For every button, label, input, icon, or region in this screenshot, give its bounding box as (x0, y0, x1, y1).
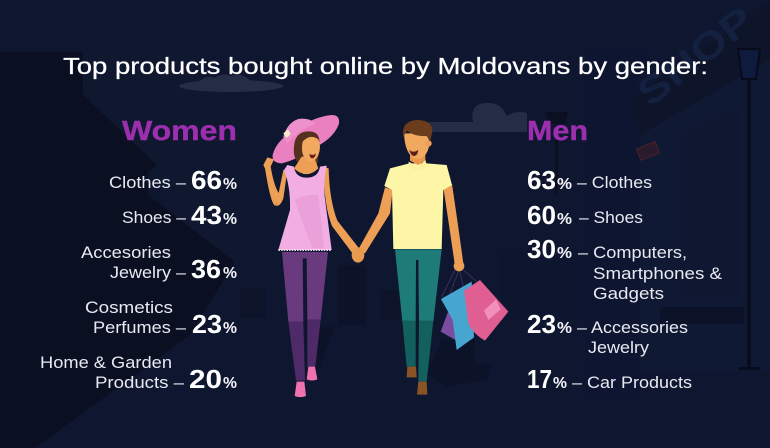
row: computers 30%: Smartphones & (593, 264, 723, 283)
man collar (408, 160, 427, 171)
row: computers 30%: % (557, 245, 572, 262)
row: shoes 60%: 60 (527, 200, 556, 230)
blue bag (441, 282, 474, 350)
man ear (425, 140, 432, 147)
row: car products 17%: – Car Products (572, 373, 692, 392)
hat flower (283, 129, 291, 138)
row: clothes 63%: – Clothes (577, 173, 652, 192)
row: cosmetics perfumes 23%: Cosmetics (85, 298, 173, 317)
row: clothes 66%: % (223, 176, 237, 193)
heading: women: Women (122, 115, 237, 146)
row: accessories jewelry 23%: – Accessories (577, 318, 688, 337)
woman legs lower (288, 319, 321, 381)
row: clothes 63%: % (557, 176, 572, 193)
shopping bags (441, 270, 508, 350)
row: shoes 43%: Shoes – (122, 208, 187, 227)
row: accessories jewelry 23%: 23 (527, 309, 556, 339)
woman hair (294, 131, 319, 163)
cloud right (423, 103, 527, 132)
row: clothes 63%: 63 (527, 165, 556, 195)
row: shoes 43%: 43 (191, 200, 222, 230)
row: home and garden 20%: Products – (95, 373, 185, 392)
bag handles (442, 270, 477, 297)
row: clothes 66%: 66 (191, 165, 222, 195)
woman legs upper (282, 252, 328, 322)
man legs upper (395, 249, 442, 322)
row: accessories jewelry 23%: % (557, 320, 572, 337)
row: clothes 66%: Clothes – (109, 173, 187, 192)
row: shoes 43% (122, 200, 237, 230)
street lamp (738, 49, 760, 370)
illustration: couple (263, 115, 508, 397)
man hair (403, 120, 432, 142)
cloud left (179, 74, 283, 92)
row: accessories jewelry 36%: % (223, 265, 237, 282)
row: cosmetics perfumes 23%: % (223, 320, 237, 337)
sale sign (636, 142, 660, 160)
ground shadows (308, 327, 493, 387)
row: home and garden 20% (40, 353, 237, 394)
row: clothes 63% (527, 165, 652, 195)
title: Top products bought online by Moldovans by gender: (63, 53, 708, 79)
row: car products 17% (527, 364, 692, 394)
woman hat (273, 115, 339, 163)
man mouth (409, 150, 418, 156)
hat brim (273, 115, 339, 163)
row: accessories jewelry 36%: Jewelry – (110, 263, 187, 282)
man (352, 120, 464, 395)
row: home and garden 20%: Home & Garden (40, 353, 172, 372)
row: car products 17%: % (553, 375, 567, 392)
row: clothes 66% (109, 165, 237, 195)
row: accessories jewelry 36%: Accesories (81, 243, 171, 262)
row: cosmetics perfumes 23%: 23 (192, 309, 222, 339)
woman top fold (295, 195, 324, 248)
row: computers 30% (527, 234, 723, 303)
woman (263, 115, 362, 397)
man free arm (443, 184, 463, 264)
clasped hands (352, 247, 364, 263)
man face (404, 133, 429, 159)
row: computers 30%: 30 (527, 234, 556, 264)
woman raised arm (263, 157, 289, 206)
woman mouth (309, 153, 316, 158)
row: accessories jewelry 23% (527, 309, 688, 357)
row: accessories jewelry 36% (81, 243, 237, 284)
pink bag (464, 280, 508, 341)
row: cosmetics perfumes 23% (85, 298, 237, 339)
pink bag label (484, 299, 501, 320)
shop sign lettering: SHOP (630, 0, 762, 115)
man shoes (407, 367, 427, 395)
row: accessories jewelry 23%: Jewelry (588, 338, 650, 357)
woman neck (294, 157, 318, 174)
woman face (302, 137, 320, 161)
row: accessories jewelry 36%: 36 (191, 254, 221, 284)
purple bag (441, 307, 458, 342)
row: computers 30%: Gadgets (593, 284, 664, 303)
row: home and garden 20%: % (223, 375, 237, 392)
heading: men: Men (527, 115, 588, 146)
row: computers 30%: – Computers, (578, 243, 687, 262)
woman lowering arm (323, 167, 362, 257)
row: shoes 60%: – Shoes (579, 208, 643, 227)
row: shoes 60%: % (557, 211, 572, 228)
row: shoes 60% (527, 200, 643, 230)
woman top (278, 165, 332, 250)
hat crown (283, 119, 316, 143)
row: shoes 43%: % (223, 211, 237, 228)
man shirt (384, 163, 452, 249)
panel: women (40, 115, 237, 394)
man neck (410, 150, 425, 165)
panel: men (527, 115, 723, 394)
woman hem (278, 247, 332, 252)
row: cosmetics perfumes 23%: Perfumes – (93, 318, 187, 337)
man hand (454, 261, 464, 271)
man holding arm (358, 187, 393, 253)
woman shoes (295, 367, 317, 397)
row: home and garden 20%: 20 (189, 364, 222, 394)
man legs lower (402, 321, 433, 382)
row: car products 17%: 17 (527, 364, 552, 394)
